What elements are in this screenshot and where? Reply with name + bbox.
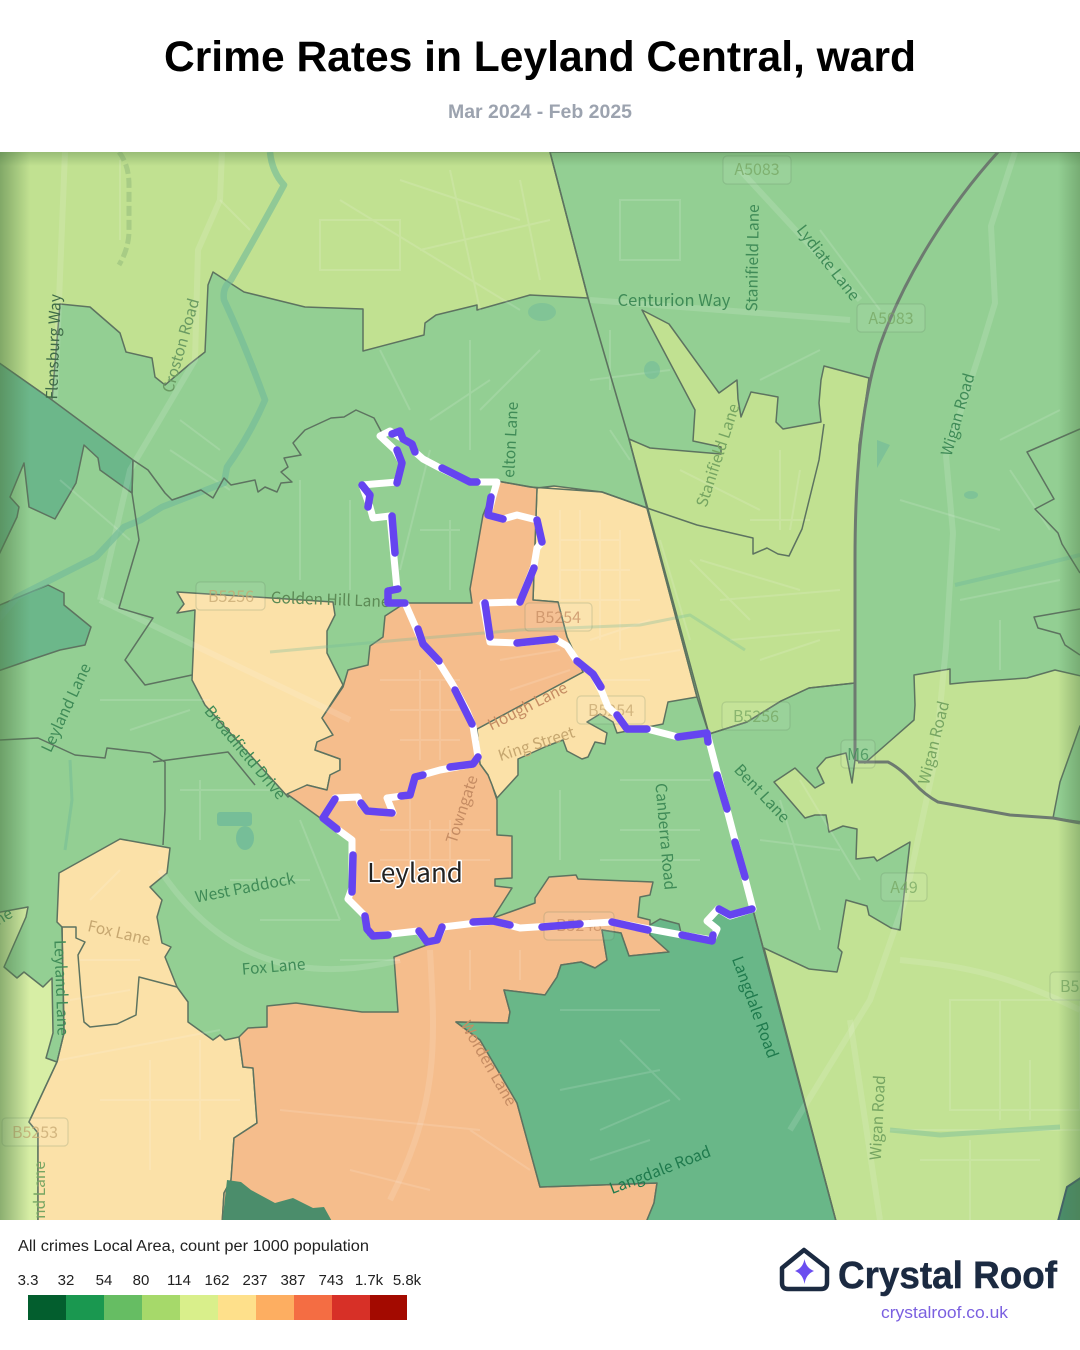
map edge vignette xyxy=(0,152,1080,1220)
road label: clipped Lane south-west: Leyland Lane xyxy=(28,1161,50,1257)
woodland patch bottom left xyxy=(222,1180,332,1220)
main diagonal boundary xyxy=(550,152,837,1225)
road label: Stanifield Lane north: Stanifield Lane xyxy=(740,204,764,312)
main roads xyxy=(55,152,1080,1220)
water ponds xyxy=(217,303,978,850)
road label: Wigan Road middle: Wigan Road xyxy=(912,699,954,787)
brand logo xyxy=(782,1250,1057,1322)
area: east cream xyxy=(477,486,697,798)
M6 motorway boundary xyxy=(855,152,1080,823)
area: main green xyxy=(0,152,1080,1225)
area: west cream xyxy=(177,592,343,797)
road shield: A5083 east: A5083 xyxy=(868,305,914,329)
legend values xyxy=(18,1272,422,1289)
road shield: B5: B5 xyxy=(1060,973,1080,997)
road label: Lydiate Lane: Lydiate Lane xyxy=(792,220,865,305)
road label: Broadfield Drive: Broadfield Drive xyxy=(200,700,291,804)
brand url: crystalroof.co.uk xyxy=(881,1303,1009,1322)
road label: Hough Lane: Hough Lane xyxy=(484,676,571,735)
road shield: A5083 north: A5083 xyxy=(734,156,780,180)
road shield: A49 xyxy=(881,873,927,901)
title: Crime Rates in Leyland Central, ward xyxy=(164,33,916,81)
road label: Langdale Road south: Langdale Road xyxy=(606,1140,714,1199)
area: north-east light green xyxy=(629,310,869,734)
road label: Centurion Way: Centurion Way xyxy=(618,287,731,311)
road label: Fox Lane west: Fox Lane xyxy=(86,914,153,950)
road label: Golden Hill Lane: Golden Hill Lane xyxy=(271,586,390,612)
legend values: 387 xyxy=(280,1272,306,1289)
road shield: A5083 east xyxy=(857,304,925,332)
road shield: A49: A49 xyxy=(890,874,918,898)
legend values: 32 xyxy=(58,1272,74,1289)
subtitle: date range: Mar 2024 - Feb 2025 xyxy=(448,102,632,123)
area: south-west cream xyxy=(29,839,257,1225)
area: south-east light green xyxy=(764,669,1080,1225)
road label: Leyland Lane south: Leyland Lane xyxy=(49,940,75,1036)
area: west dark green xyxy=(0,360,133,563)
legend values: 162 xyxy=(204,1272,230,1289)
road label: Langdale Road east: Langdale Road xyxy=(727,953,784,1061)
road label: Croston Road: Croston Road xyxy=(156,296,204,395)
road shield: B5 xyxy=(1050,972,1080,1000)
river and water features xyxy=(0,152,1080,1135)
area: south-west dark green xyxy=(0,585,91,672)
area: east edge green xyxy=(1053,726,1080,823)
road label: Towngate: Towngate xyxy=(440,772,483,846)
road shield: M6 xyxy=(841,740,875,768)
road shield: M6: M6 xyxy=(847,741,869,765)
road label: West Paddock: West Paddock xyxy=(193,867,297,908)
railway line xyxy=(119,152,129,265)
area: south dark green xyxy=(456,907,837,1225)
road label: Bent Lane: Bent Lane xyxy=(730,759,795,827)
place label: Leyland: Leyland xyxy=(367,853,463,890)
icon: house with star xyxy=(782,1250,827,1289)
legend colour scale xyxy=(28,1295,407,1320)
ward boundary: white base line xyxy=(323,431,753,942)
road label: King Street: King Street xyxy=(495,721,577,766)
road shield: B5254 south xyxy=(577,696,645,724)
road shield: B5254 north xyxy=(525,603,592,631)
road shield: B5256 east xyxy=(722,702,790,730)
legend title: All crimes Local Area, count per 1000 population xyxy=(18,1238,369,1255)
road shield: A5083 north xyxy=(723,156,791,184)
road shield: B5256 west xyxy=(196,582,265,610)
legend xyxy=(18,1238,422,1320)
road label: Stanifield Lane south: Stanifield Lane xyxy=(690,401,744,510)
road shield: B5253 xyxy=(2,1118,68,1146)
road shield: B5254 south: B5254 xyxy=(588,697,634,721)
legend values: 54 xyxy=(96,1272,112,1289)
road shield: B5248 xyxy=(544,912,614,940)
legend values: 237 xyxy=(242,1272,268,1289)
road shield: B5256 west: B5256 xyxy=(208,583,254,607)
area: central orange xyxy=(222,481,669,1225)
internal boundary lines xyxy=(0,410,1080,1062)
legend values: 3.3 xyxy=(18,1272,38,1289)
ward boundary: purple dashes xyxy=(323,431,752,942)
road label: Fox Lane centre: Fox Lane xyxy=(241,952,306,980)
brand name: Crystal Roof xyxy=(838,1255,1057,1297)
road shield: B5253: B5253 xyxy=(12,1119,58,1143)
road label: Wigan Road south: Wigan Road xyxy=(864,1075,890,1161)
legend values: 80 xyxy=(133,1272,149,1289)
legend values: 1.7k xyxy=(355,1272,384,1289)
legend values: 743 xyxy=(318,1272,344,1289)
legend values: 5.8k xyxy=(393,1272,422,1289)
road label: Canberra Road: Canberra Road xyxy=(650,782,682,891)
road label: Worden Lane: Worden Lane xyxy=(456,1016,523,1110)
woodland patch bottom right xyxy=(1057,1177,1080,1220)
minor streets xyxy=(60,160,1080,1220)
road label: Wigan Road north: Wigan Road xyxy=(935,370,980,458)
road label: Leyland Lane north: Leyland Lane xyxy=(35,659,96,756)
road label: Wheelton Lane: elton Lane xyxy=(497,401,523,478)
road shield: B5256 east: B5256 xyxy=(733,703,779,727)
legend values: 114 xyxy=(167,1272,191,1289)
road label: Flensburg Way: Flensburg Way xyxy=(40,294,66,400)
road shield: B5248: B5248 xyxy=(556,912,602,936)
road shield: B5254 north: B5254 xyxy=(535,604,581,628)
